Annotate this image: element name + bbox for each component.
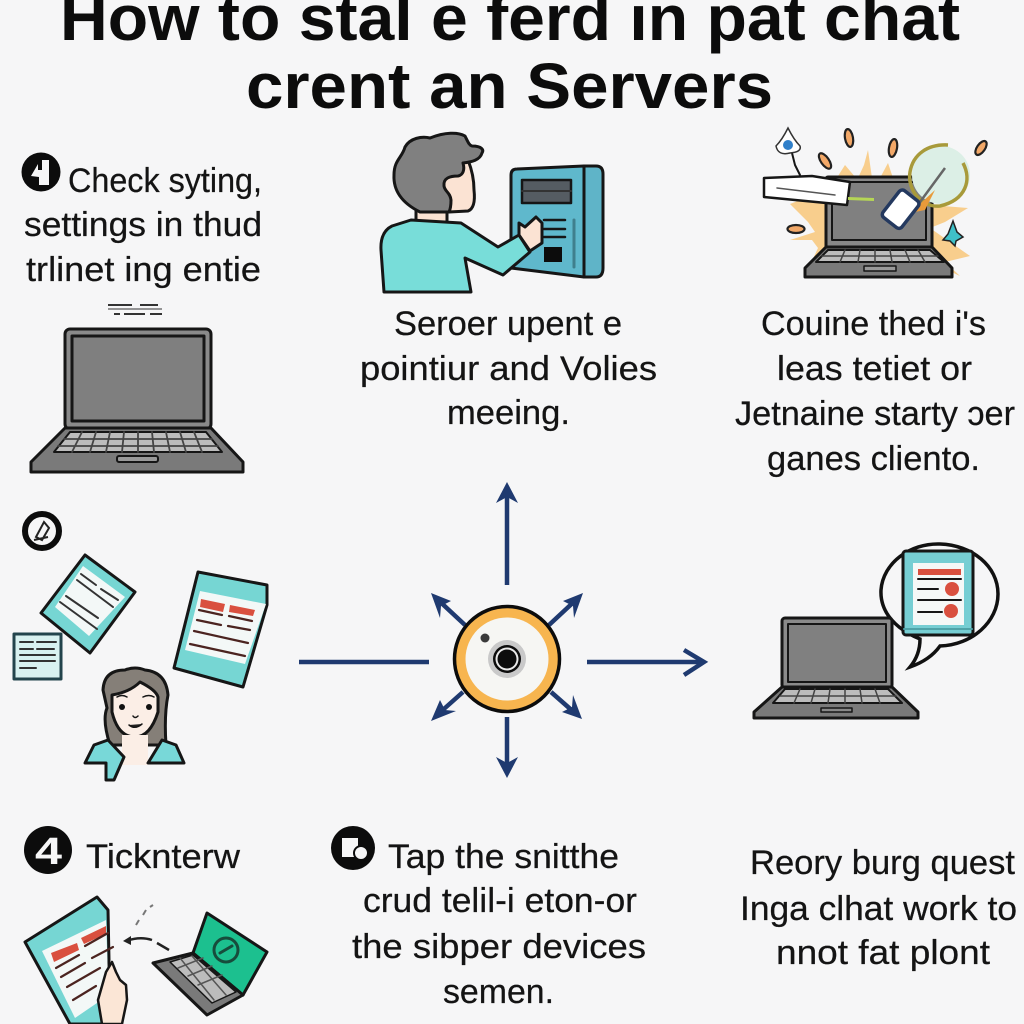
step 3 text: ganes cliento. xyxy=(767,440,980,478)
badge: step 4 xyxy=(24,826,72,874)
icon: small note xyxy=(14,634,61,679)
step 5 text: crud telil-i eton-or xyxy=(363,882,637,920)
step 5 text: semen. xyxy=(443,973,554,1011)
chart: central hub with arrows xyxy=(299,482,704,778)
step 1 text: trlinet ing entie xyxy=(26,251,261,289)
icon: drop centre xyxy=(783,140,793,150)
title: crent an Servers xyxy=(246,50,773,122)
badge: step 5 xyxy=(331,826,375,870)
icon: dashed connector arrow xyxy=(123,905,169,950)
arrow: right xyxy=(587,650,704,675)
step 2 text xyxy=(360,305,657,432)
arrow: down xyxy=(496,717,518,778)
arrow: south-west xyxy=(431,692,463,721)
arrow: north-east xyxy=(549,593,583,625)
arrow: north-west xyxy=(431,593,465,625)
step 2 text: meeing. xyxy=(447,394,570,432)
step 3 text: leas tetiet or xyxy=(777,350,972,388)
icon: magnifier ring xyxy=(905,145,970,212)
hub: disc xyxy=(454,606,560,712)
panel: documents and person xyxy=(14,514,267,780)
text block: closing request: Inga clhat work to xyxy=(740,890,1017,928)
icon: tilted document xyxy=(41,555,135,653)
step 3 text xyxy=(735,305,1015,478)
step 1 text xyxy=(24,162,262,289)
arrow: left line xyxy=(299,660,429,664)
text block: closing request xyxy=(740,844,1017,972)
icon: coins xyxy=(788,128,989,233)
text block: closing request: nnot fat plont xyxy=(776,934,991,972)
step 2 text: Seroer upent e xyxy=(394,305,622,343)
icon: wall panel xyxy=(511,166,603,277)
panel: step 2 server panel xyxy=(360,133,657,432)
panel: step 3 laptop burst xyxy=(735,128,1015,478)
badge: step 4: 4 xyxy=(35,831,62,873)
badge: step 1 xyxy=(22,152,60,192)
icon: laptop xyxy=(31,329,243,472)
icon: tag xyxy=(881,188,921,230)
icon: white note xyxy=(764,153,874,205)
step 3 text: Couine thed i's xyxy=(761,305,986,343)
icon: speech bubble xyxy=(881,544,998,667)
step 2 text: pointiur and Volies xyxy=(360,350,657,388)
step 4 text: Ticknterw xyxy=(86,838,240,876)
panel: laptop with speech bubble xyxy=(754,544,998,718)
icon: report document xyxy=(174,572,267,687)
step 5 text xyxy=(352,838,646,1011)
small caption marks xyxy=(108,305,162,314)
step 5 text: Tap the snitthe xyxy=(388,838,619,876)
icon: drop xyxy=(776,128,800,154)
icon: checklist document xyxy=(903,551,973,635)
step 1 text: settings in thud xyxy=(24,206,262,244)
icon: laptop xyxy=(754,618,918,718)
icon: woman xyxy=(85,668,184,780)
step 1 text: Check syting, xyxy=(68,162,262,200)
text block: closing request: Reory burg quest xyxy=(750,844,1016,882)
icon: orange burst rays xyxy=(790,150,970,276)
badge: step 2 xyxy=(25,514,59,548)
title xyxy=(60,0,960,122)
icon: laptop with tag xyxy=(805,177,952,277)
step 3 text: Jetnaine starty ɔer xyxy=(735,395,1015,433)
icon: man pressing panel xyxy=(381,133,542,292)
panel: step 5 instructions xyxy=(331,826,646,1011)
step 5 text: the sibper devices xyxy=(352,928,646,966)
arrow: south-east xyxy=(551,692,582,719)
icon: laptop with green screen xyxy=(153,913,267,1015)
panel: step 1 check settings xyxy=(22,152,262,472)
panel: step 4 ticket xyxy=(24,826,267,1024)
icon: teal star xyxy=(943,221,963,246)
icon: report held in hand xyxy=(25,897,127,1024)
arrow: up xyxy=(496,482,518,585)
